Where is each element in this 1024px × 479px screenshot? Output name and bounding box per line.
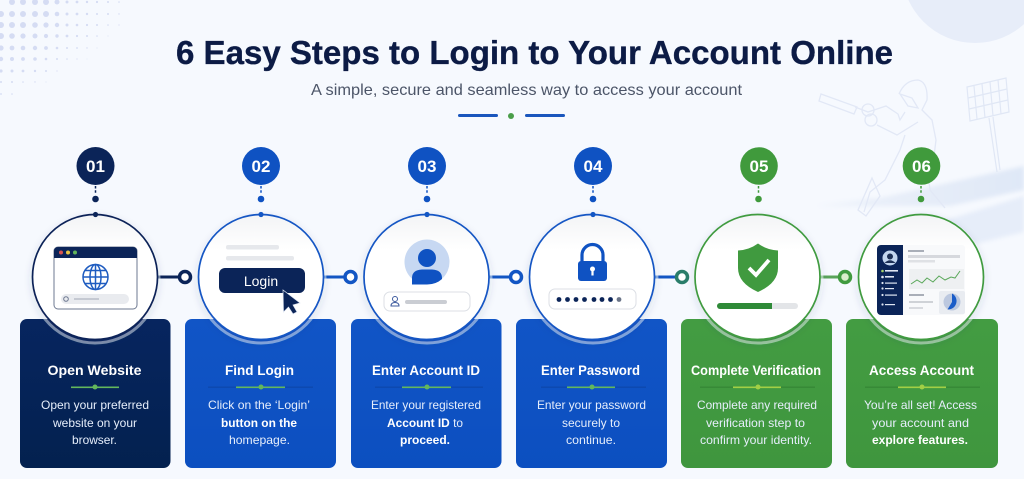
- title divider: [458, 113, 565, 119]
- step 5 circle with verification shield: [694, 214, 822, 343]
- login button: Login: [244, 273, 278, 289]
- body text: website on your: [52, 416, 137, 430]
- step 6 badge and stem: 06: [912, 157, 931, 176]
- body text: [697, 398, 817, 447]
- background: corner circle: [902, 0, 1024, 43]
- body text: [208, 398, 310, 447]
- step 4 badge and stem: 04: [584, 157, 603, 176]
- body text: Account ID to: [387, 416, 463, 430]
- icon: mouse cursor: [283, 290, 300, 314]
- heading: Access Account: Access Account: [869, 362, 974, 378]
- connector 2 to 3: [322, 272, 356, 282]
- body text: Click on the ‘Login’: [208, 398, 310, 412]
- panel: step 2 card: [185, 319, 336, 468]
- body text: proceed.: [400, 433, 450, 447]
- icon: shield with check: [738, 244, 778, 292]
- body text: button on the: [221, 416, 297, 430]
- step 3 circle with account ID icon: [363, 212, 491, 343]
- body text: [864, 398, 977, 447]
- step 4 badge and stem: [574, 147, 612, 202]
- step 3 badge and stem: [408, 147, 446, 202]
- body text: Complete any required: [697, 398, 817, 412]
- panel: step 4 card: [516, 319, 667, 468]
- body text: homepage.: [229, 433, 290, 447]
- icon: user avatar: [404, 240, 450, 284]
- title: 6 Easy Steps to Login to Your Account Online: [176, 34, 893, 71]
- body text: continue.: [566, 433, 616, 447]
- accent line: [700, 384, 815, 390]
- step 2 badge and stem: 02: [252, 157, 270, 176]
- body text: verification step to: [706, 416, 805, 430]
- background: halftone dot pattern: [0, 0, 120, 95]
- panel: step 6 card: [846, 319, 998, 468]
- panel: step 5 card: [681, 319, 832, 468]
- icon: browser window with globe: [54, 247, 137, 309]
- placeholder lines: [226, 245, 294, 260]
- heading: Enter Account ID: Enter Account ID: [372, 362, 480, 378]
- body text: explore features.: [872, 433, 968, 447]
- step 1 badge and stem: [76, 147, 114, 202]
- body text: your account and: [872, 416, 969, 430]
- panel: step 1 card: [20, 319, 170, 468]
- heading: Enter Password: Enter Password: [541, 362, 640, 378]
- body text: Open your preferred: [41, 398, 149, 412]
- step 3 badge and stem: 03: [418, 157, 436, 176]
- step 2 badge and stem: [242, 147, 280, 202]
- accent line: [375, 384, 483, 390]
- connector 5 to 6: [819, 272, 850, 282]
- step 5 badge and stem: [740, 147, 778, 202]
- accent line: [541, 384, 646, 390]
- body text: [537, 398, 646, 447]
- password input: [549, 289, 636, 309]
- connector 3 to 4: [488, 272, 522, 282]
- accent line: [208, 384, 313, 390]
- progress bar: [717, 303, 798, 309]
- step 2 circle with login button: [197, 212, 325, 343]
- body text: securely to: [562, 416, 620, 430]
- accent line: [71, 384, 119, 390]
- connector 4 to 5: [653, 272, 688, 282]
- step 6 badge and stem: [903, 147, 940, 202]
- icon: dashboard window: [877, 245, 965, 315]
- body text: browser.: [72, 433, 117, 447]
- connector 1 to 2: [156, 272, 190, 282]
- account ID input: [384, 292, 470, 311]
- heading: Find Login: Find Login: [225, 362, 294, 378]
- step 5 badge and stem: 05: [750, 157, 768, 176]
- step 4 circle with password icon: [529, 212, 657, 343]
- step 6 circle with dashboard: [857, 214, 985, 343]
- step 1 badge and stem: 01: [86, 157, 105, 176]
- heading: Open Website: Open Website: [48, 362, 142, 378]
- panel: step 3 card: [351, 319, 502, 468]
- accent line: [865, 384, 980, 390]
- body text: [41, 398, 149, 447]
- body text: You’re all set! Access: [864, 398, 977, 412]
- body text: [371, 398, 481, 447]
- background: cricket batsman and stadium illustration: [812, 78, 1024, 244]
- body text: Enter your password: [537, 398, 646, 412]
- body text: confirm your identity.: [700, 433, 812, 447]
- icon: padlock: [578, 245, 607, 281]
- subtitle: A simple, secure and seamless way to access your account: [311, 82, 743, 99]
- step 1 circle with browser icon: [31, 212, 159, 343]
- body text: Enter your registered: [371, 398, 481, 412]
- heading: Complete Verification: Complete Verification: [691, 362, 821, 378]
